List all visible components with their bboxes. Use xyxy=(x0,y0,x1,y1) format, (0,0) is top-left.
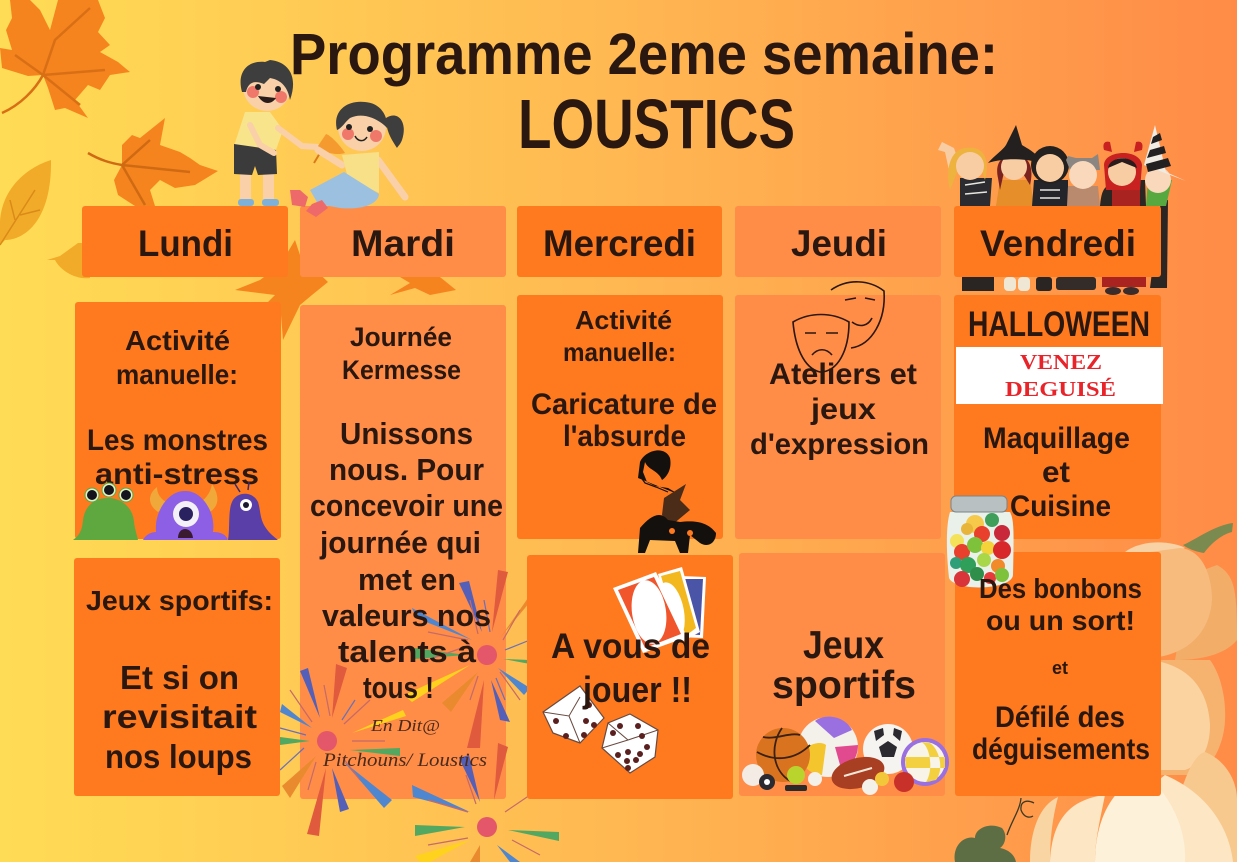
header: Jeudi xyxy=(735,206,941,277)
panel: Vendredi afternoon: ou un sort! xyxy=(986,605,1135,636)
text: Mardi: concevoir une xyxy=(310,488,503,523)
panel: Lundi morning: Activité xyxy=(125,325,230,356)
text: Cuisine: Cuisine xyxy=(1010,490,1111,523)
icon: autumn leaves xyxy=(0,0,456,340)
text: Mardi: tous ! xyxy=(363,670,434,705)
panel: Vendredi afternoon xyxy=(947,496,1161,796)
panel: Mercredi morning: Caricature de xyxy=(531,388,717,421)
text: Mardi: Unissons xyxy=(340,416,473,451)
signature: Pitchouns/ Loustics xyxy=(322,750,487,771)
header: Lundi xyxy=(82,206,288,277)
panel: Lundi morning: anti-stress xyxy=(95,458,259,491)
panel: Vendredi afternoon: Des bonbons xyxy=(979,573,1142,604)
signature: En Dit@ xyxy=(370,716,440,735)
title xyxy=(290,22,998,163)
header: Vendredi xyxy=(954,206,1161,277)
callout: venez deguise xyxy=(956,347,1163,404)
icon: firework bottom xyxy=(412,743,559,862)
callout: venez deguise: VENEZ xyxy=(1020,350,1102,374)
header: Mardi xyxy=(300,206,506,277)
icon: children playing xyxy=(234,60,405,217)
text: Mardi: Journée xyxy=(350,322,452,352)
icon: dice xyxy=(543,686,658,773)
icon: monsters xyxy=(73,482,278,540)
panel: day headers xyxy=(82,206,1161,277)
icon: pumpkins xyxy=(1030,523,1237,862)
panel: Vendredi morning: et xyxy=(1042,456,1070,489)
title: Programme 2eme semaine: xyxy=(290,22,998,87)
panel: Mercredi afternoon: jouer !! xyxy=(582,669,692,710)
text: Mardi: valeurs nos xyxy=(322,598,491,633)
signature xyxy=(322,716,487,771)
panel: Mercredi morning xyxy=(517,295,723,539)
header: Mercredi: Mercredi xyxy=(543,223,696,264)
panel: Mercredi morning: l'absurde xyxy=(563,420,686,453)
panel: Vendredi morning: HALLOWEEN xyxy=(968,305,1150,344)
panel: Vendredi morning: Maquillage xyxy=(983,422,1130,455)
text: Mardi xyxy=(310,322,503,705)
panel: Mercredi morning: Activité xyxy=(575,305,672,335)
header: Mardi: Mardi xyxy=(351,223,455,264)
panel: Lundi afternoon: nos loups xyxy=(105,738,252,775)
panel: Jeudi morning xyxy=(735,295,941,539)
panel: Mercredi morning: manuelle: xyxy=(563,337,676,367)
icon: playing cards xyxy=(613,567,706,653)
panel: Jeudi afternoon: Jeux xyxy=(803,624,884,667)
icon: halloween children xyxy=(938,125,1186,295)
text: Mardi: met en xyxy=(358,562,456,597)
panel: Jeudi morning: d'expression xyxy=(750,428,929,461)
header: Mercredi xyxy=(517,206,722,277)
icon: sports balls xyxy=(742,717,949,795)
panel: Jeudi morning: jeux xyxy=(810,393,876,426)
icon: firework top xyxy=(404,570,530,748)
panel: Lundi morning xyxy=(75,302,281,539)
panel: Lundi morning: Les monstres xyxy=(87,424,268,457)
icon: pumpkin leaf and vine xyxy=(955,798,1034,862)
panel: Vendredi afternoon: déguisements xyxy=(972,733,1150,766)
text: Mardi: journée qui xyxy=(319,525,481,560)
text: Mardi: talents à xyxy=(338,634,477,669)
panel: Mardi background xyxy=(300,305,506,799)
text: Mardi: nous. Pour xyxy=(329,452,484,487)
header: Jeudi: Jeudi xyxy=(791,223,887,264)
panel: Vendredi afternoon: et xyxy=(1052,658,1068,678)
panel: Jeudi morning: Ateliers et xyxy=(769,358,917,391)
panel: Jeudi afternoon xyxy=(739,553,945,796)
panel: Vendredi afternoon: Défilé des xyxy=(995,701,1125,734)
panel: Lundi morning: manuelle: xyxy=(116,359,238,390)
panel: Vendredi morning xyxy=(954,295,1161,539)
panel: Mercredi afternoon xyxy=(527,555,733,799)
panel: Lundi afternoon: Et si on xyxy=(120,659,239,696)
panel: Lundi afternoon: Jeux sportifs: xyxy=(86,585,273,616)
text: Mardi: Kermesse xyxy=(342,355,461,385)
callout: venez deguise: DEGUISÉ xyxy=(1005,377,1116,401)
panel: Lundi afternoon xyxy=(74,558,280,796)
panel: Jeudi afternoon: sportifs xyxy=(772,664,916,707)
icon: theatre masks xyxy=(793,282,884,372)
header: Lundi: Lundi xyxy=(138,223,233,264)
panel: Mercredi afternoon: A vous de xyxy=(551,627,710,666)
icon: candy jar xyxy=(947,496,1014,587)
icon: caricature figure xyxy=(638,450,716,553)
title: LOUSTICS xyxy=(518,85,795,163)
icon: firework left xyxy=(280,664,406,836)
panel: Lundi afternoon: revisitait xyxy=(102,698,257,735)
header: Vendredi: Vendredi xyxy=(980,223,1136,264)
